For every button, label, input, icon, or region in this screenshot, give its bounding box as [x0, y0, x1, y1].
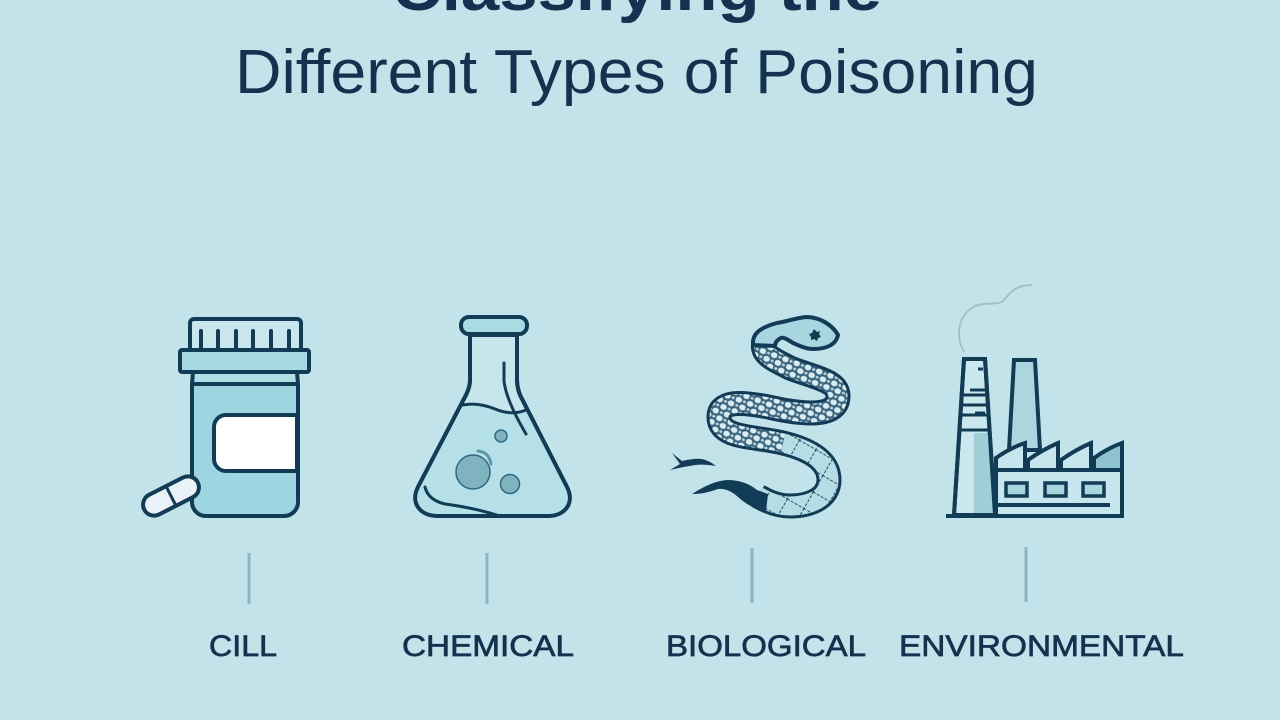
connector lines: [249, 547, 1026, 604]
icon: snake: [670, 317, 838, 512]
snake head: [753, 317, 838, 349]
title: [235, 0, 1038, 107]
title: Different Types of Poisoning: [235, 38, 1038, 107]
icon: chemical flask: [415, 317, 570, 516]
icon: factory: [946, 285, 1124, 516]
smoke: [959, 285, 1032, 352]
category labels: CHEMICAL: [402, 630, 574, 663]
category labels: BIOLOGICAL: [666, 630, 866, 663]
category labels: [209, 630, 1184, 663]
pill: [139, 473, 203, 519]
icon: pill bottle: [139, 319, 309, 519]
category labels: CILL: [209, 630, 277, 663]
snake tongue: [670, 453, 716, 470]
bubbles: [456, 430, 520, 494]
factory windows: [1006, 483, 1104, 496]
category labels: ENVIRONMENTAL: [899, 630, 1184, 663]
